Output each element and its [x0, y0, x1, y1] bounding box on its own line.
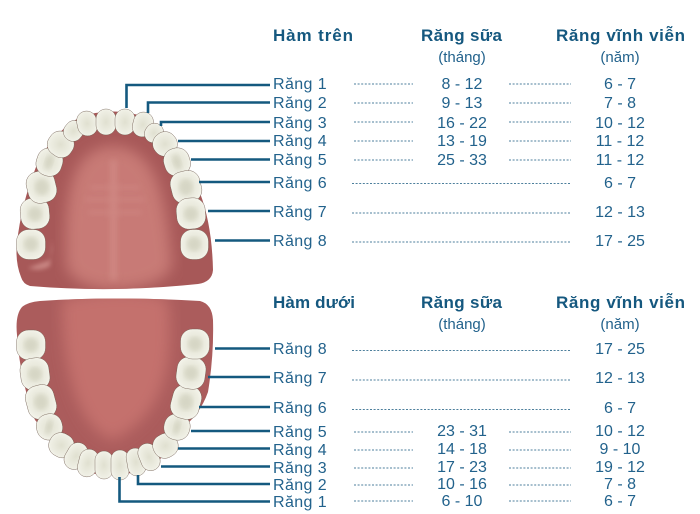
- lower table headings: Răng vĩnh viễn: [556, 293, 685, 312]
- upper table rows: Răng 2: [273, 95, 327, 112]
- lower table headings: [273, 293, 685, 333]
- upper teeth: [16, 109, 208, 260]
- upper table rows: 11 - 12: [596, 152, 644, 169]
- upper table rows: 10 - 12: [595, 115, 645, 132]
- lower table headings: Răng sữa: [421, 293, 503, 312]
- upper table headings: Răng vĩnh viễn: [556, 26, 685, 45]
- lower table headings: Hàm dưới: [273, 293, 355, 312]
- upper table rows: Răng 5: [273, 152, 327, 169]
- lower table rows: Răng 2: [273, 477, 327, 494]
- lower jaw illustration: [16, 292, 213, 480]
- lower table rows: 17 - 23: [437, 459, 487, 476]
- lower teeth: [16, 329, 210, 480]
- lower table rows: 7 - 8: [604, 476, 636, 493]
- upper table dotted leaders: [352, 84, 571, 242]
- upper jaw leader lines: [126, 85, 270, 240]
- lower table rows: Răng 1: [273, 494, 327, 511]
- tongue area: [62, 292, 170, 440]
- upper table rows: 6 - 7: [604, 175, 636, 192]
- lower table rows: [273, 341, 645, 511]
- lower table rows: Răng 4: [273, 442, 327, 459]
- lower jaw leader lines: [120, 348, 270, 502]
- lower table rows: 19 - 12: [595, 459, 645, 476]
- lower table rows: 6 - 10: [442, 493, 483, 510]
- upper table rows: 12 - 13: [595, 204, 645, 221]
- lower table rows: Răng 6: [273, 400, 327, 417]
- upper table rows: Răng 1: [273, 76, 327, 93]
- upper jaw illustration: [16, 109, 213, 290]
- lower table rows: 12 - 13: [595, 370, 645, 387]
- upper table rows: 13 - 19: [437, 133, 487, 150]
- upper table headings: (tháng): [438, 49, 486, 66]
- upper table rows: 25 - 33: [437, 152, 487, 169]
- lower table rows: 10 - 16: [437, 476, 487, 493]
- lower table rows: 6 - 7: [604, 493, 636, 510]
- lower table rows: Răng 3: [273, 460, 327, 477]
- upper table rows: 6 - 7: [604, 76, 636, 93]
- upper table rows: Răng 4: [273, 133, 327, 150]
- lower table rows: 9 - 10: [600, 441, 641, 458]
- upper table headings: Hàm trên: [273, 26, 353, 45]
- gum highlights behind molars: [30, 258, 52, 272]
- upper table rows: 16 - 22: [437, 115, 487, 132]
- lower table rows: 23 - 31: [437, 423, 487, 440]
- lower table rows: 14 - 18: [437, 441, 487, 458]
- lower table rows: Răng 5: [273, 424, 327, 441]
- lower table rows: Răng 7: [273, 370, 327, 387]
- upper table rows: 7 - 8: [604, 95, 636, 112]
- upper table rows: 8 - 12: [442, 76, 483, 93]
- upper table rows: 11 - 12: [596, 133, 644, 150]
- upper gum: [16, 112, 213, 289]
- upper table rows: Răng 8: [273, 233, 327, 250]
- lower table rows: 10 - 12: [595, 423, 645, 440]
- upper table rows: 9 - 13: [442, 95, 483, 112]
- lower gum: [17, 298, 213, 475]
- palate ridges: [110, 164, 118, 278]
- upper table headings: Răng sữa: [421, 26, 503, 45]
- upper table rows: Răng 6: [273, 175, 327, 192]
- upper table rows: 17 - 25: [595, 233, 645, 250]
- lower table rows: 6 - 7: [604, 400, 636, 417]
- upper table rows: Răng 3: [273, 115, 327, 132]
- lower table dotted leaders: [352, 350, 571, 501]
- lower table rows: Răng 8: [273, 341, 327, 358]
- lower table headings: (tháng): [438, 316, 486, 333]
- upper table headings: [273, 26, 685, 66]
- upper table headings: (năm): [600, 49, 640, 66]
- upper table rows: Răng 7: [273, 204, 327, 221]
- upper table rows: [273, 76, 645, 250]
- lower table rows: 17 - 25: [595, 341, 645, 358]
- upper palate: [28, 146, 172, 290]
- lower table headings: (năm): [600, 316, 640, 333]
